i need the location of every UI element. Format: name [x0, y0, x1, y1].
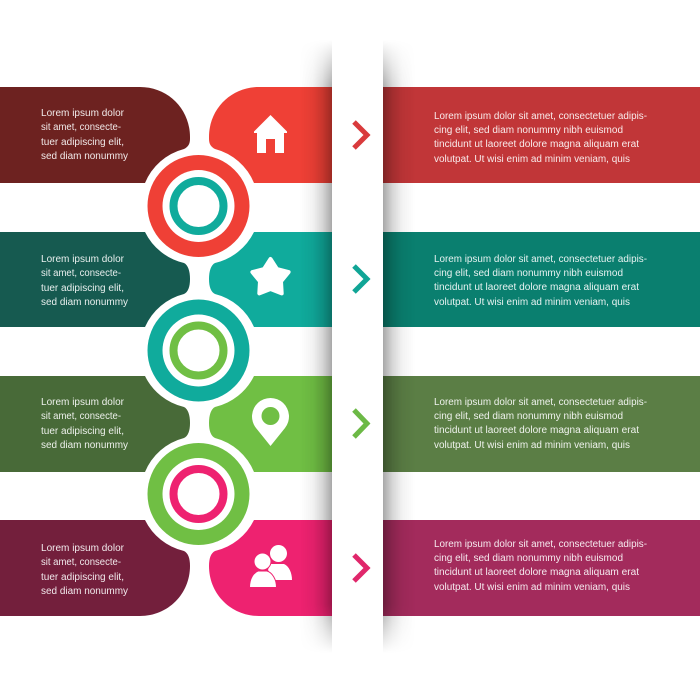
- text: row 1 right: cing elit, sed diam nonummy nibh euismod: [434, 125, 623, 136]
- central white strip: [332, 40, 383, 653]
- icon: star: [252, 259, 289, 293]
- text: row 2 right: [434, 254, 647, 308]
- text: row 1 right: [434, 111, 647, 165]
- panel: row 2 left text: Lorem ipsum dolor: [41, 254, 125, 265]
- panel: row 3 left text: tuer adipiscing elit,: [41, 426, 124, 437]
- panel: row 1 left text: tuer adipiscing elit,: [41, 137, 124, 148]
- text: row 4 right: Lorem ipsum dolor sit amet, consectetuer adipis-: [434, 539, 647, 550]
- panel: row 2 icon tab: [209, 232, 340, 327]
- panel: row 2 left text: [0, 232, 190, 327]
- arrow: row 2: [354, 266, 367, 292]
- connector ring 2: [148, 300, 250, 402]
- text: row 2 right: tincidunt ut laoreet dolore magna aliquam erat: [434, 282, 639, 293]
- text: row 3 right: cing elit, sed diam nonummy nibh euismod: [434, 411, 623, 422]
- panel: row 4 icon tab: [209, 520, 340, 616]
- icon: people: [250, 545, 292, 588]
- panel: row 2 left text: sed diam nonummy: [41, 297, 128, 308]
- panel: row 3 left text: sit amet, consecte-: [41, 411, 121, 422]
- arrow: row 3: [354, 410, 367, 437]
- text: row 4 right: tincidunt ut laoreet dolore magna aliquam erat: [434, 567, 639, 578]
- arrow: row 4: [354, 555, 367, 581]
- panel: row 4 left text: tuer adipiscing elit,: [41, 572, 124, 583]
- panel: row 2 left text: sit amet, consecte-: [41, 268, 121, 279]
- panel: row 3 left text: sed diam nonummy: [41, 440, 128, 451]
- text: row 1 right: Lorem ipsum dolor sit amet, consectetuer adipis-: [434, 111, 647, 122]
- panel: row 4 left text: Lorem ipsum dolor: [41, 543, 125, 554]
- text: row 2 right: volutpat. Ut wisi enim ad minim veniam, quis: [434, 297, 630, 308]
- text: row 2 right: cing elit, sed diam nonummy nibh euismod: [434, 268, 623, 279]
- panel: row 3 left text: [0, 376, 190, 472]
- text: row 4 right: cing elit, sed diam nonummy nibh euismod: [434, 553, 623, 564]
- text: row 3 right: Lorem ipsum dolor sit amet, consectetuer adipis-: [434, 397, 647, 408]
- panel: row 2 right band: [383, 232, 700, 327]
- arrow: row 1: [354, 122, 367, 148]
- text: row 1 right: tincidunt ut laoreet dolore magna aliquam erat: [434, 139, 639, 150]
- text: row 3 right: volutpat. Ut wisi enim ad minim veniam, quis: [434, 440, 630, 451]
- panel: row 3 icon tab: [209, 376, 340, 472]
- panel: row 1 left text: sit amet, consecte-: [41, 122, 121, 133]
- panel: row 3 left text: Lorem ipsum dolor: [41, 397, 125, 408]
- strip shadows: [308, 45, 406, 648]
- panel: row 1 icon tab: [209, 87, 340, 183]
- panel: row 1 left text: [0, 87, 190, 183]
- panel: row 2 left text: tuer adipiscing elit,: [41, 283, 124, 294]
- icon: map pin: [252, 398, 289, 446]
- text: row 2 right: Lorem ipsum dolor sit amet, consectetuer adipis-: [434, 254, 647, 265]
- panel: row 1 left text: sed diam nonummy: [41, 151, 128, 162]
- panel: row 4 left text: sed diam nonummy: [41, 586, 128, 597]
- text: row 1 right: volutpat. Ut wisi enim ad minim veniam, quis: [434, 154, 630, 165]
- panel: row 4 left text: sit amet, consecte-: [41, 557, 121, 568]
- connector ring 1: [148, 155, 250, 257]
- icon: house: [254, 115, 287, 153]
- panel: row 3 right band: [383, 376, 700, 472]
- connector ring 3: [148, 443, 250, 545]
- text: row 4 right: [434, 539, 647, 593]
- text: row 4 right: volutpat. Ut wisi enim ad minim veniam, quis: [434, 582, 630, 593]
- text: row 3 right: [434, 397, 647, 451]
- panel: row 1 right band: [383, 87, 700, 183]
- text: row 3 right: tincidunt ut laoreet dolore magna aliquam erat: [434, 425, 639, 436]
- panel: row 4 left text: [0, 520, 190, 616]
- panel: row 4 right band: [383, 520, 700, 616]
- panel: row 1 left text: Lorem ipsum dolor: [41, 108, 125, 119]
